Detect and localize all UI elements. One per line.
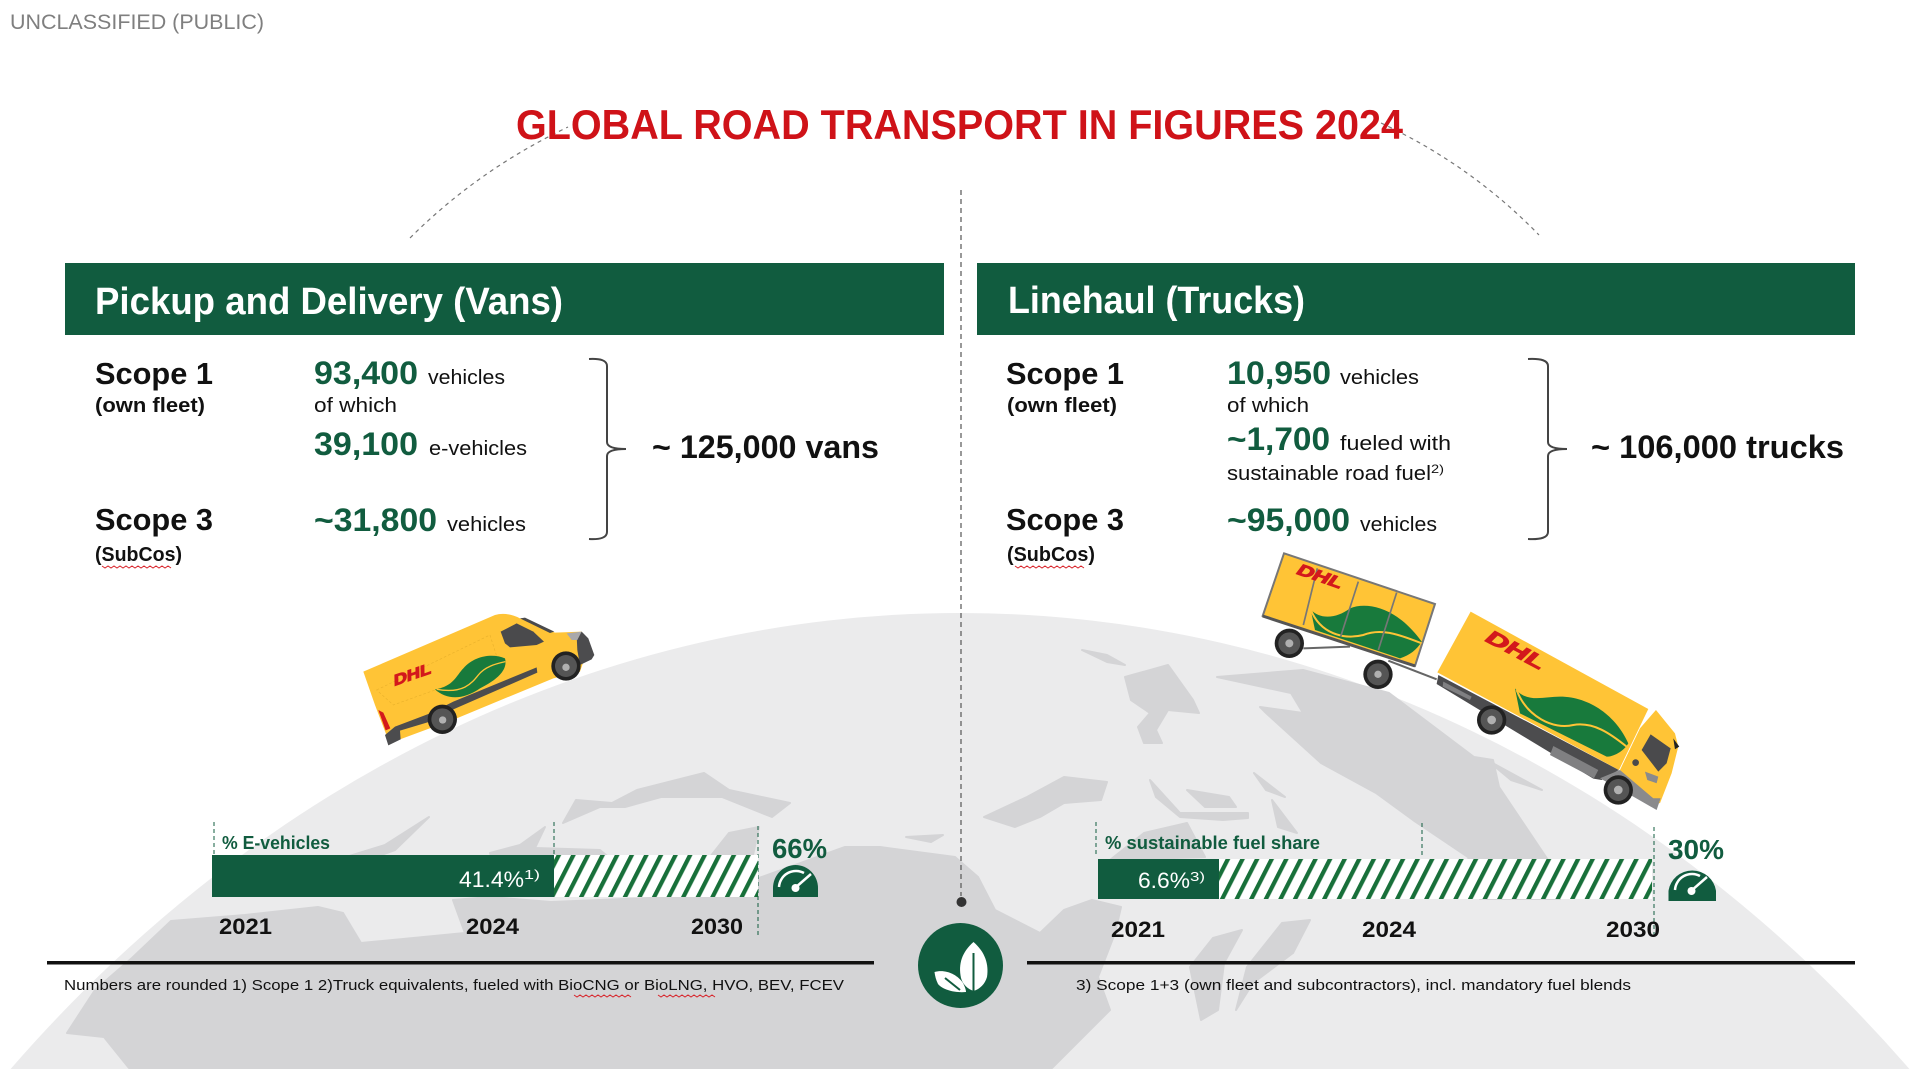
classification label: UNCLASSIFIED (PUBLIC) [10, 11, 264, 34]
dashed arc left [410, 127, 568, 238]
e-vehicle count: 39,100 [314, 426, 418, 462]
DHL logo on truck: DHL [1480, 628, 1552, 673]
bar value: 41.4% [459, 867, 524, 892]
scope 3 vehicles unit: vehicles [447, 514, 526, 536]
sustainable fuel count: ~1,700 [1227, 421, 1330, 457]
subcos label: (SubCos) [1007, 544, 1095, 566]
scope 3 vehicles unit: vehicles [1360, 514, 1437, 536]
scope 1 label: Scope 1 [1006, 356, 1124, 391]
footnote marker 3: 3) [1190, 869, 1205, 884]
year 2024: 2024 [466, 914, 520, 939]
year 2021: 2021 [219, 914, 272, 939]
target value: 30% [1668, 834, 1724, 865]
chart label: % E-vehicles [222, 833, 330, 853]
own fleet label: (own fleet) [1007, 395, 1117, 417]
hatched remainder to 2030 [1219, 859, 1652, 899]
vehicles unit: vehicles [428, 367, 505, 389]
rule right [1027, 961, 1855, 964]
icon: DHL truck with trailer [1263, 553, 1679, 810]
footnote marker 1: 1) [524, 867, 540, 882]
spelling squiggle [1015, 566, 1084, 568]
target value: 66% [772, 833, 827, 864]
globe background [11, 613, 1909, 1069]
year 2024: 2024 [1362, 917, 1417, 942]
scope 3 label: Scope 3 [95, 502, 213, 537]
chart: e-vehicle share bar [212, 822, 827, 939]
center dashed divider with dot [956, 190, 966, 907]
total vans: ~ 125,000 vans [652, 429, 879, 465]
scope 1 label: Scope 1 [95, 356, 213, 391]
trailer [1263, 553, 1437, 689]
year 2030: 2030 [691, 914, 743, 939]
total trucks: ~ 106,000 trucks [1591, 429, 1844, 465]
spelling squiggle [102, 566, 171, 568]
DHL logo on van: DHL [394, 660, 431, 690]
year 2021: 2021 [1111, 917, 1165, 942]
chart: sustainable fuel share bar [1096, 822, 1724, 942]
panel: pickup and delivery [65, 263, 944, 568]
of which: of which [1227, 395, 1309, 417]
scope 1 vehicle count: 93,400 [314, 355, 418, 391]
scope 3 vehicle count: ~95,000 [1227, 502, 1350, 538]
fueled with: fueled with [1340, 433, 1451, 455]
hatched remainder to 2030 [554, 855, 758, 897]
icon: DHL van [363, 614, 594, 745]
bar value: 6.6% [1138, 868, 1190, 893]
footnote marker 2: 2) [1431, 462, 1444, 476]
footnote right: 3) Scope 1+3 (own fleet and subcontractors), incl. mandatory fuel blends [1076, 977, 1631, 994]
header bar: trucks [977, 263, 1855, 335]
own fleet label: (own fleet) [95, 395, 205, 417]
panel: linehaul [977, 263, 1855, 568]
sustainable road fuel: sustainable road fuel [1227, 463, 1431, 485]
scope 3 vehicle count: ~31,800 [314, 502, 437, 538]
year 2030: 2030 [1606, 917, 1660, 942]
footnote left: Numbers are rounded 1) Scope 1 2)Truck equivalents, fueled with BioCNG or BioLNG, HVO, BEV, FCEV [64, 977, 844, 994]
e-vehicles unit: e-vehicles [429, 438, 527, 460]
truck [1437, 612, 1679, 810]
heading: trucks: Linehaul (Trucks) [1008, 280, 1305, 322]
solid bar to 2024 [212, 855, 554, 897]
subcos label: (SubCos) [95, 544, 182, 566]
header bar: vans [65, 263, 944, 335]
icon: leaf badge [918, 923, 1003, 1008]
bracket [589, 359, 626, 539]
DHL logo on trailer: DHL [1293, 562, 1348, 592]
heading: vans: Pickup and Delivery (Vans) [95, 281, 563, 323]
bracket [1528, 359, 1567, 539]
vehicles unit: vehicles [1340, 367, 1419, 389]
scope 1 vehicle count: 10,950 [1227, 355, 1331, 391]
icon: gauge [1668, 870, 1716, 901]
title: GLOBAL ROAD TRANSPORT IN FIGURES 2024 [516, 101, 1404, 148]
solid bar to 2024 [1098, 859, 1219, 899]
of which: of which [314, 395, 397, 417]
scope 3 label: Scope 3 [1006, 502, 1124, 537]
dashed arc right [1381, 123, 1539, 235]
rule left [47, 961, 874, 964]
chart label: % sustainable fuel share [1105, 833, 1320, 853]
icon: gauge [773, 865, 818, 897]
